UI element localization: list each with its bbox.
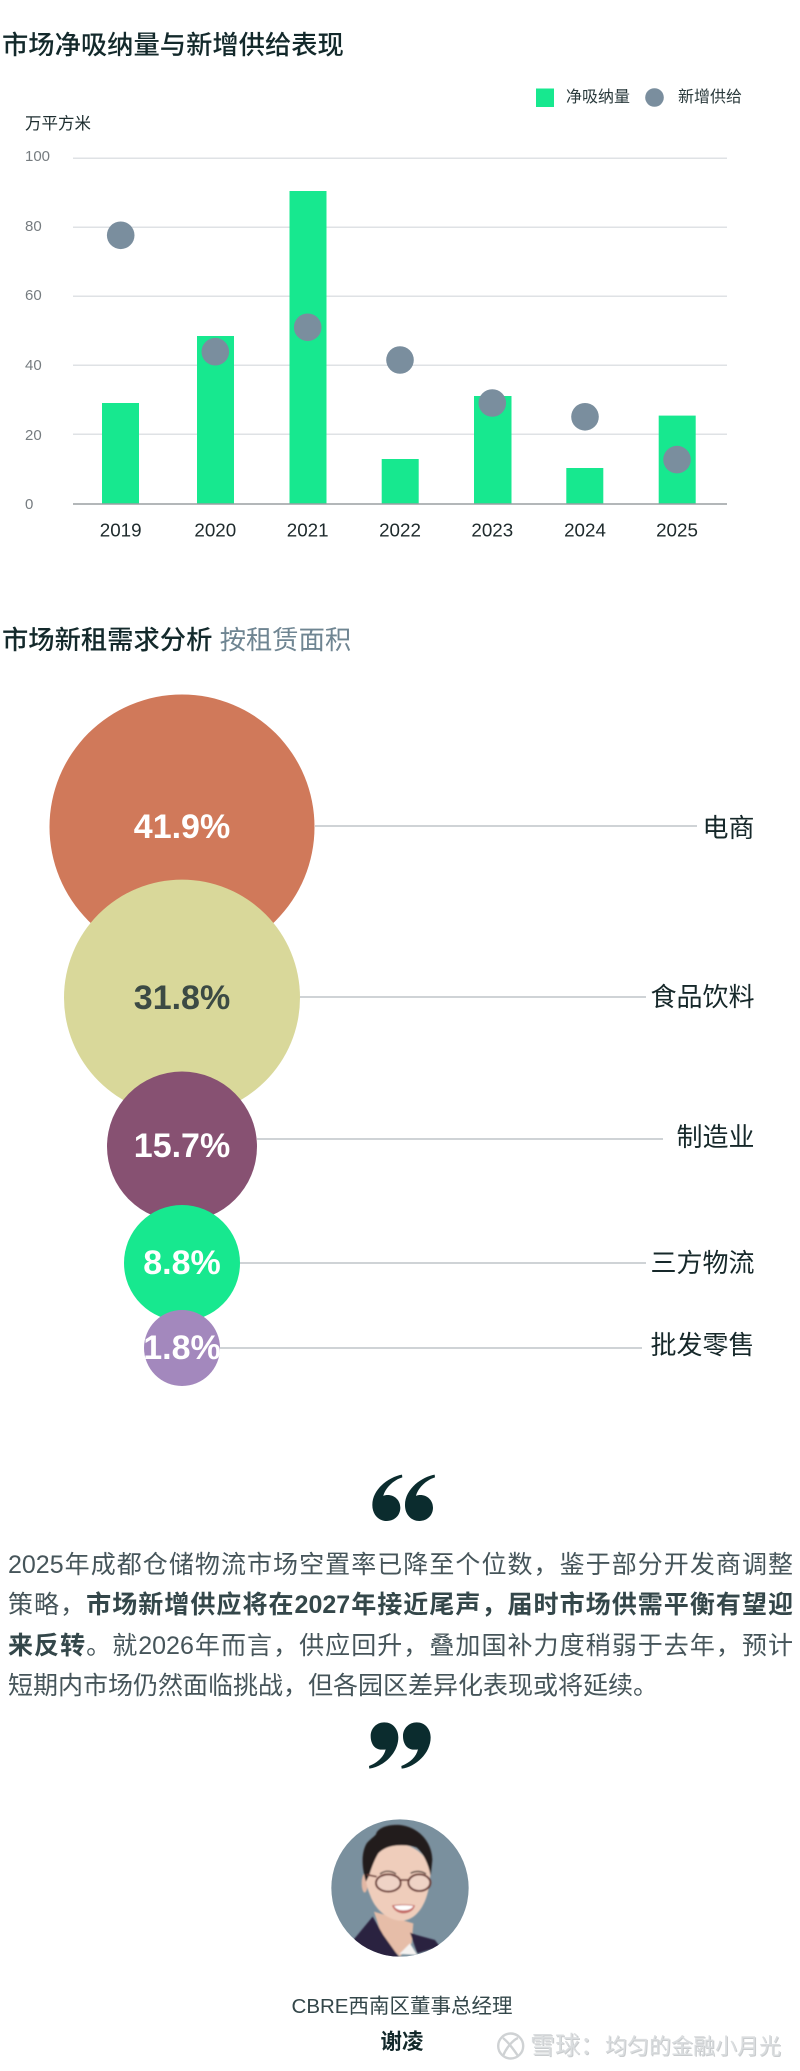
avatar: portrait of Xie Ling bbox=[331, 1819, 469, 1960]
bubble: e-commerce 41.9%: 电商 bbox=[702, 813, 754, 843]
quote text block: 来反转。就2026年而言，供应回升，叠加国补力度稍弱于去年，预计 bbox=[8, 1632, 793, 1660]
y axis labels: 60 bbox=[25, 287, 42, 304]
x axis year labels: 2022 bbox=[379, 520, 421, 540]
bubble: third party logistics 8.8% bbox=[124, 1205, 754, 1321]
quote text block: 短期内市场仍然面临挑战，但各园区差异化表现或将延续。 bbox=[8, 1672, 658, 1700]
y axis labels: 100 bbox=[25, 148, 50, 165]
attribution: job title: CBRE西南区董事总经理 bbox=[292, 1995, 512, 2018]
legend bbox=[536, 88, 742, 107]
x axis year labels: 2020 bbox=[194, 520, 236, 540]
bubble: e-commerce 41.9%: 41.9% bbox=[134, 808, 230, 846]
legend: 净吸纳量 bbox=[566, 88, 630, 106]
icon: opening quote mark bbox=[372, 1475, 435, 1521]
x axis year labels: 2021 bbox=[287, 520, 329, 540]
bubble: third party logistics 8.8%: 三方物流 bbox=[650, 1248, 754, 1278]
y axis labels: 20 bbox=[25, 427, 42, 444]
y axis labels: 80 bbox=[25, 218, 42, 235]
x axis year labels bbox=[100, 520, 698, 540]
bubble: food and beverage 31.8%: 食品饮料 bbox=[650, 982, 754, 1012]
bubble chart: new leasing demand by sector bbox=[50, 694, 754, 2060]
quote text block: 策略，市场新增供应将在2027年接近尾声，届时市场供需平衡有望迎 bbox=[8, 1591, 793, 1619]
quote text block bbox=[8, 1551, 793, 1700]
watermark text: 雪球：均匀的金融小月光 bbox=[530, 2032, 781, 2060]
x axis year labels: 2024 bbox=[564, 520, 606, 540]
bubble: manufacturing 15.7% bbox=[107, 1072, 754, 1222]
bubble: wholesale and retail 1.8%: 批发零售 bbox=[650, 1330, 754, 1360]
bubble: food and beverage 31.8% bbox=[64, 880, 754, 1116]
x axis year labels: 2023 bbox=[471, 520, 513, 540]
heading: net absorption and new supply: 市场净吸纳量与新增供给表现 bbox=[2, 30, 344, 60]
y axis unit: 万平方米 bbox=[25, 114, 91, 133]
x axis year labels: 2025 bbox=[656, 520, 698, 540]
y axis labels bbox=[25, 148, 50, 513]
legend: 新增供给 bbox=[678, 88, 742, 106]
heading: new leasing demand analysis: 市场新租需求分析 按租赁面积 bbox=[2, 625, 351, 655]
bubble: manufacturing 15.7%: 15.7% bbox=[134, 1127, 230, 1165]
bubble: wholesale and retail 1.8%: 1.8% bbox=[143, 1329, 221, 1367]
bars: net absorption bbox=[102, 191, 696, 504]
dots: new supply bbox=[107, 222, 691, 473]
attribution: name: 谢凌 bbox=[380, 2030, 424, 2054]
y axis labels: 0 bbox=[25, 496, 33, 513]
bubble: e-commerce 41.9% bbox=[50, 694, 754, 960]
bar chart: net absorption and new supply 2019-2025 bbox=[25, 88, 742, 540]
bubble: manufacturing 15.7%: 制造业 bbox=[676, 1122, 754, 1152]
x axis year labels: 2019 bbox=[100, 520, 142, 540]
icon: closing quote mark bbox=[369, 1722, 431, 1769]
quote text block: 2025年成都仓储物流市场空置率已降至个位数，鉴于部分开发商调整 bbox=[8, 1551, 793, 1579]
bubble: third party logistics 8.8%: 8.8% bbox=[143, 1244, 221, 1282]
bubble: food and beverage 31.8%: 31.8% bbox=[134, 979, 230, 1017]
watermark logo bbox=[498, 2034, 523, 2058]
y axis labels: 40 bbox=[25, 357, 42, 374]
bubble: wholesale and retail 1.8% bbox=[143, 1310, 754, 1386]
